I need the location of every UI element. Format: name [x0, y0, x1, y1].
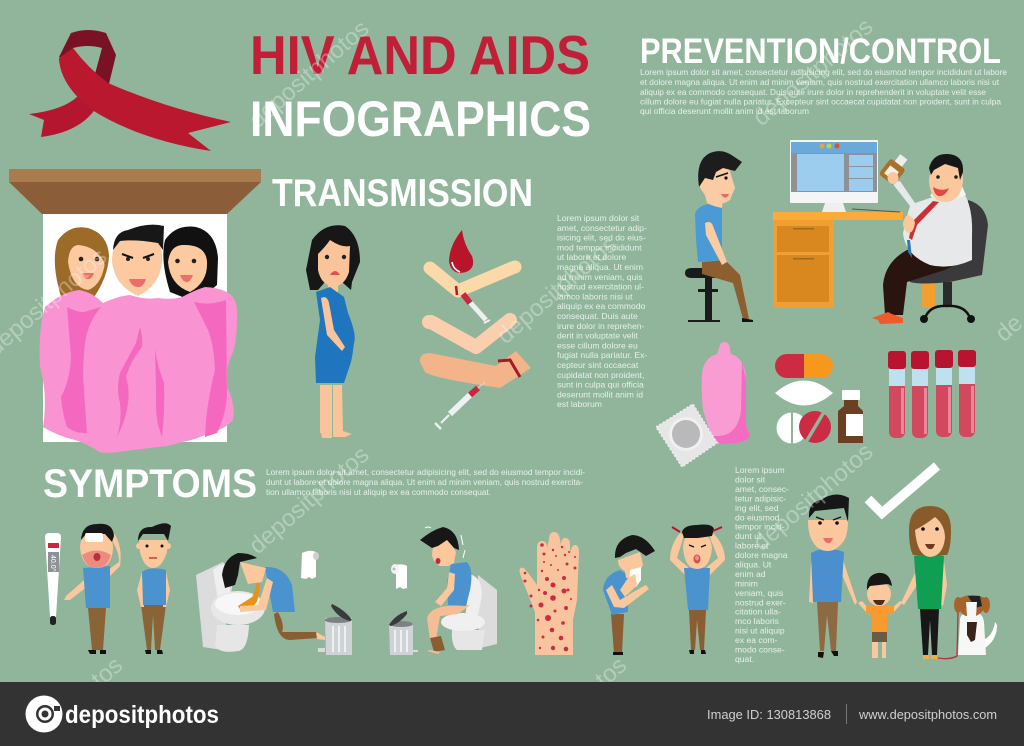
text block: transmission: deserunt mollit anim id [557, 389, 643, 399]
illustration: man with fever [64, 524, 121, 654]
text block: right column: enim ad [735, 569, 766, 579]
text block: right column: tempor incid- [735, 522, 785, 532]
boy [858, 573, 903, 658]
text block: right column: dunt ut [735, 531, 762, 541]
icon: toilet paper 2 [391, 564, 407, 589]
text block: transmission: magna aliqua. Ut enim [557, 262, 643, 272]
text block: transmission: fugiat nulla pariatur. Ex- [557, 350, 647, 360]
text block: right column: modo conse- [735, 644, 785, 654]
text block: right column: ex ea com- [735, 635, 778, 645]
text block: right column: mco laboris [735, 616, 779, 626]
title: INFOGRAPHICS [250, 91, 591, 147]
footer bar [0, 682, 1024, 746]
text block: right column: labore et [735, 541, 769, 551]
text block: transmission: ad minim veniam, quis [557, 272, 642, 282]
text block: transmission: sunt in culpa qui officia [557, 380, 644, 390]
text block: symptoms: tion ullamco laboris nisi ut aliquip ex ea commodo consequat. [266, 487, 491, 497]
text block: symptoms: Lorem ipsum dolor sit amet, consectetur adipisicing elit, sed do eiusmod tempor incidi- [266, 467, 585, 477]
text block: prevention: et dolore magna aliqua. Ut enim ad minim veniam, quis nostrud exercitation ullamco laboris nisi ut [640, 77, 1000, 87]
text block: transmission: amet, consectetur adip- [557, 223, 647, 233]
ribbon icon [29, 30, 231, 151]
text block: symptoms: dunt ut labore et dolore magna aliqua. Ut enim ad minim veniam, quis nostrud exercita- [266, 477, 583, 487]
text block: transmission: derit in voluptate velit [557, 331, 638, 341]
title [250, 24, 591, 147]
text block: right column: veniam, quis [735, 588, 783, 598]
text block: transmission: Lorem ipsum dolor sit [557, 213, 640, 223]
illustration: man coughing [603, 535, 655, 655]
icon: thermometer: 40.0°C [49, 555, 57, 576]
mother [901, 506, 951, 659]
text block: transmission: cepteur sint occaecat [557, 360, 639, 370]
text block: right column: amet, consec- [735, 484, 789, 494]
text block: right column: tetur adipisic- [735, 493, 786, 503]
watermark overlay: depositphotos [244, 15, 374, 134]
watermark overlay: depositphotos [748, 13, 878, 132]
text block: transmission: mod tempor incididunt [557, 242, 642, 252]
heading: symptoms: SYMPTOMS [43, 462, 257, 506]
illustration: doctor holding medicine [872, 151, 988, 324]
icon: thermometer [45, 533, 61, 625]
text block: transmission: irure dolor in reprehen- [557, 321, 645, 331]
illustration: man vomiting into toilet [196, 553, 325, 652]
icon: trash can 2 [389, 611, 418, 655]
text block: prevention: Lorem ipsum dolor sit amet, consectetur adipisicing elit, sed do eiusmod tempor incididunt ut labore [640, 67, 1007, 77]
text block: transmission [557, 213, 647, 409]
watermark overlay: depositphotos [492, 231, 622, 350]
watermark overlay: tos [590, 652, 632, 693]
text block: transmission: aliquip ex ea commodo [557, 301, 646, 311]
text block: transmission: isicing elit, sed do eius- [557, 233, 646, 243]
heading: transmission: TRANSMISSION [272, 172, 533, 215]
illustration: pills and medicine bottle [775, 354, 863, 444]
text block: right column: dolor sit [735, 474, 766, 484]
text block: transmission: est laborum [557, 399, 602, 409]
illustration: tired man [136, 523, 171, 654]
title: HIV AND AIDS [250, 24, 590, 86]
text block: transmission: esse cillum dolore eu [557, 340, 638, 350]
illustration: blood test tubes [888, 350, 976, 438]
text block: right column: nisi ut aliquip [735, 626, 785, 636]
text block: right column: Lorem ipsum [735, 465, 785, 475]
watermark overlay: depositphotos [244, 441, 374, 560]
illustration: pregnant woman [306, 225, 360, 438]
text block: right column [735, 465, 789, 664]
text block: prevention: qui officia deserunt mollit anim id est laborum [640, 106, 809, 116]
text block: right column: minim [735, 578, 758, 588]
illustration: patient on stool [685, 151, 753, 322]
text block: right column: quat. [735, 654, 754, 664]
illustration: hand with rash [520, 532, 579, 655]
illustration: desk [773, 209, 935, 308]
illustration: man with headache [670, 524, 725, 654]
footer logo: depositphotos [65, 701, 219, 729]
text block: transmission: nostrud exercitation ul- [557, 282, 644, 292]
icon: toilet paper [301, 551, 319, 579]
icon: trash can [318, 604, 352, 655]
watermark overlay: tos [86, 652, 128, 693]
text block: transmission: ut labore et dolore [557, 252, 626, 262]
illustration: blood drop and shared needles [420, 230, 531, 429]
illustration: condom and wrapper [656, 342, 750, 467]
footer logo [26, 696, 219, 732]
illustration: computer monitor [790, 140, 878, 212]
footer url: www.depositphotos.com [858, 708, 997, 722]
text block: symptoms [266, 467, 585, 497]
text block: right column: do eiusmod [735, 512, 780, 522]
dog [938, 595, 997, 659]
footer image id: Image ID: 130813868 [707, 708, 831, 722]
text block: prevention [640, 67, 1007, 116]
text block: prevention: cillum dolore eu fugiat nulla pariatur. Excepteur sint occaecat cupidatat non proident, sunt in culpa [640, 96, 1001, 106]
text block: prevention: aliquip ex ea commodo consequat. Duis aute irure dolor in reprehenderit in voluptate velit esse [640, 87, 986, 97]
text block: right column: nostrud exer- [735, 597, 786, 607]
text block: right column: dolore magna [735, 550, 788, 560]
watermark overlay: depositphotos [748, 438, 878, 557]
illustration: bed with three people [9, 169, 261, 453]
illustration: man with diarrhea on toilet [420, 527, 497, 654]
father [808, 494, 857, 658]
text block: transmission: cupidatat non proident, [557, 370, 644, 380]
text block: right column: citation ulla- [735, 607, 781, 617]
icon: check mark [868, 466, 937, 513]
text block: transmission: lamco laboris nisi ut [557, 291, 633, 301]
text block: transmission: consequat. Duis aute [557, 311, 638, 321]
text block: right column: ing elit, sed [735, 503, 779, 513]
text block: right column: aliqua. Ut [735, 560, 772, 570]
illustration: healthy family with dog [808, 494, 997, 659]
